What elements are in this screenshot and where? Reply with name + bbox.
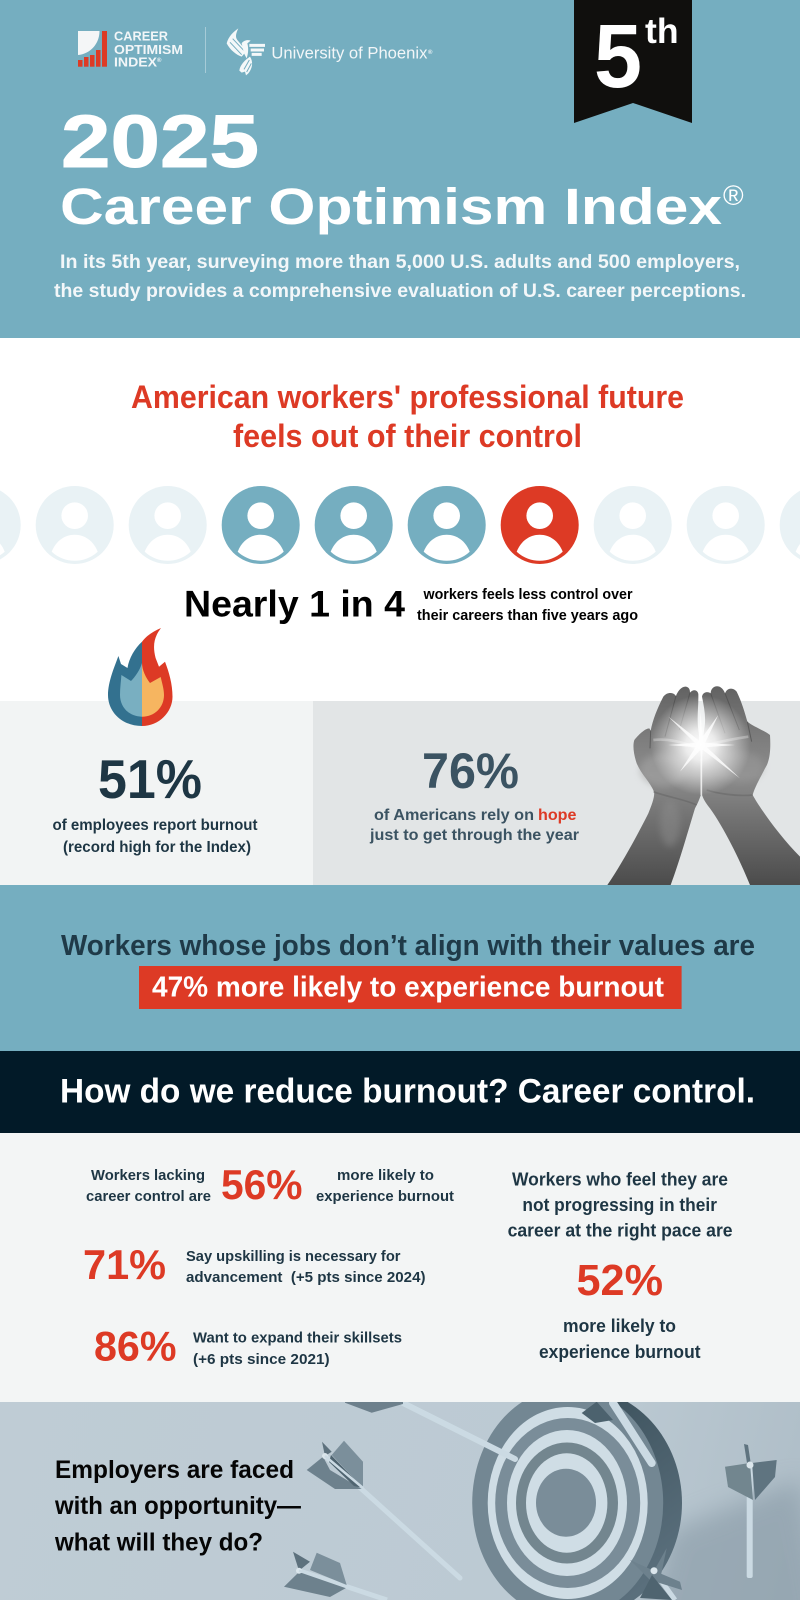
band: values misalignment callout: Workers whose jobs don’t align with their values are — [61, 930, 755, 962]
ribbon: 5th — [574, 0, 692, 123]
stat 71%: Say upskilling is necessary for — [186, 1249, 401, 1265]
section heading: American workers' professional future — [131, 379, 684, 415]
panel: hope — [313, 686, 800, 885]
logo: Career Optimism Index: INDEX — [114, 56, 158, 70]
logo: University of Phoenix: University of Phoenix — [271, 44, 428, 62]
section heading — [131, 379, 684, 454]
logo: Career Optimism Index: ® — [157, 57, 162, 64]
logo: University of Phoenix: ® — [428, 49, 433, 56]
hope caption: hope — [538, 807, 577, 824]
stat 56%: career control are — [86, 1189, 211, 1205]
closing question: what will they do? — [54, 1529, 263, 1557]
stat 86% — [94, 1323, 402, 1370]
closing question: Employers are faced — [55, 1456, 294, 1484]
stat 86%: 86% — [94, 1323, 176, 1370]
stat: nearly 1 in 4 — [184, 584, 638, 625]
hope caption — [369, 807, 579, 844]
dart: lower left — [284, 1552, 387, 1600]
burnout caption — [52, 817, 258, 856]
icon: flame — [108, 628, 172, 726]
burnout caption: (record high for the Index) — [63, 839, 251, 856]
stat 86%: (+6 pts since 2021) — [193, 1352, 330, 1368]
image: cupped hands with light — [607, 686, 800, 885]
band: how do we reduce burnout — [0, 1051, 800, 1133]
logo divider — [205, 27, 206, 73]
image: target and darts — [284, 1388, 800, 1600]
stat: nearly 1 in 4: their careers than five years ago — [417, 608, 638, 624]
logo: Career Optimism Index: CAREER — [114, 30, 168, 44]
stat 52% — [508, 1170, 733, 1362]
logo: Career Optimism Index: OPTIMISM — [114, 43, 183, 57]
burnout caption: of employees report burnout — [52, 817, 258, 834]
stat 86%: Want to expand their skillsets — [193, 1331, 402, 1347]
stat 56%: 56% — [221, 1161, 302, 1208]
stat 71%: advancement (+5 pts since 2024) — [186, 1270, 426, 1286]
stat 51%: 51% — [98, 748, 202, 810]
dart: bottom right in target — [630, 1548, 682, 1600]
panel: employers opportunity — [0, 1388, 800, 1600]
stat 52%: career at the right pace are — [508, 1221, 733, 1241]
ribbon: 5th: th — [645, 12, 679, 51]
intro text — [54, 252, 746, 302]
band: how do we reduce burnout: How do we reduce burnout? Career control. — [60, 1073, 755, 1111]
stat 52%: 52% — [576, 1256, 663, 1305]
callout: 47%: 47% more likely to experience burnout — [152, 972, 664, 1004]
closing question: with an opportunity— — [54, 1492, 301, 1520]
people icon row — [0, 486, 800, 564]
header panel — [0, 0, 800, 338]
stat 56%: Workers lacking — [91, 1168, 205, 1184]
intro text: In its 5th year, surveying more than 5,000 U.S. adults and 500 employers, — [60, 252, 740, 273]
dart: middle — [307, 1441, 460, 1578]
title: ® — [723, 180, 744, 211]
stat 52%: Workers who feel they are — [512, 1170, 728, 1190]
stat 56%: more likely to — [337, 1168, 434, 1184]
ribbon: 5th: 5 — [594, 7, 642, 107]
dart: right standing — [725, 1444, 777, 1578]
closing question — [54, 1456, 301, 1557]
section heading: feels out of their control — [233, 418, 582, 454]
intro text: the study provides a comprehensive evaluation of U.S. career perceptions. — [54, 281, 746, 302]
stat 52%: more likely to — [563, 1316, 676, 1336]
panel: burnout — [0, 628, 313, 885]
stat 52%: not progressing in their — [522, 1195, 717, 1215]
stat 76%: 76% — [422, 743, 519, 799]
logo: University of Phoenix — [227, 28, 433, 75]
hope caption: of Americans rely on — [374, 807, 534, 824]
stat: nearly 1 in 4: workers feels less control over — [423, 587, 633, 603]
stat 56%: experience burnout — [316, 1189, 454, 1205]
dart: in target top — [582, 1402, 652, 1463]
stat 52%: experience burnout — [539, 1342, 700, 1362]
title: Career Optimism Index — [60, 178, 722, 235]
stat 71%: 71% — [83, 1241, 166, 1288]
panel: career control stats — [0, 1133, 800, 1402]
stat 71% — [83, 1241, 426, 1288]
logo: Career Optimism Index — [78, 30, 183, 70]
hope caption: just to get through the year — [369, 827, 579, 844]
band: values misalignment callout — [0, 885, 800, 1051]
stat 56% — [86, 1161, 454, 1208]
title year: 2025 — [61, 100, 259, 183]
dart: top left shaft — [345, 1402, 515, 1459]
stat: nearly 1 in 4: Nearly 1 in 4 — [184, 584, 405, 625]
